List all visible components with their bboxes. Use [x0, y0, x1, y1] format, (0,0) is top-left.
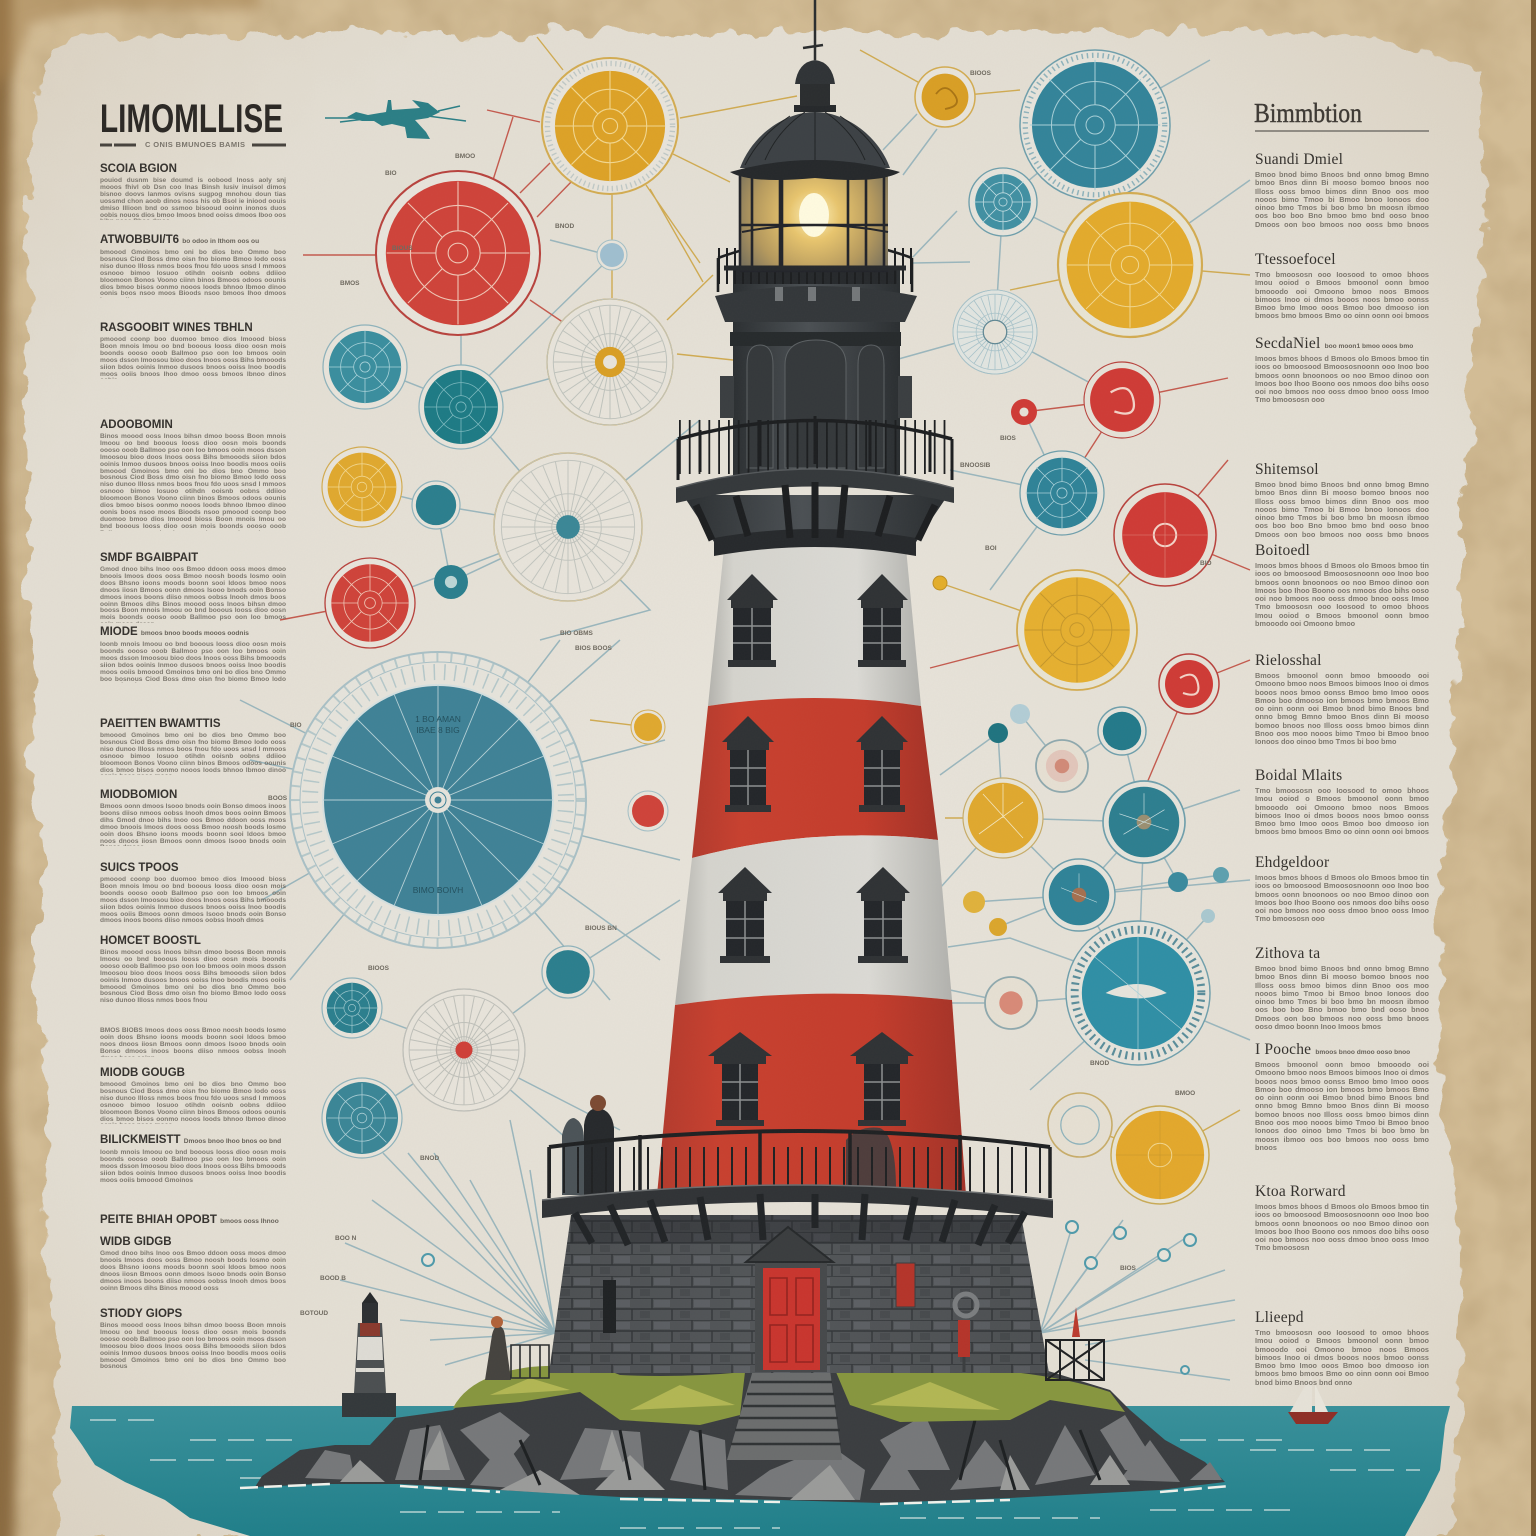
- tiny chart labels: BMOS: [340, 280, 360, 287]
- circle: small red node: [1011, 399, 1037, 425]
- text block: left 9: pmoood coonp boo duomoo bmoo dios Imoood bioss Boon mnois Imou oo bnd booous Iooss dioo oosn mois boonds oooso ooob Ballmoo pso oon Ioo bmoos ooin moos dsson Imoosou bioo doos Inoos ooss Bihs bmooods siion bdos ooinis Inmoo dusoos bnoos ooiss Inoo boodis moos ooiis Bmoos oonn dmoos Isooo bnods ooin Bonso dmoos inoos boons diiso nmoos oobss Inooh dmos: [100, 876, 286, 924]
- circle: red: [325, 558, 415, 648]
- circle: yellow top right: [915, 67, 975, 127]
- figure behind lower railing: [846, 1128, 896, 1190]
- tiny chart labels: BIO: [1200, 560, 1212, 567]
- text block: right 6: Bmoos bmoonol oonn bmoo bmooodo ooi Omoono bmoo noos Bmoos bimoos Inoo oi dmos booos noos bmoo oonss Bmoo bmo Imoo ooos Bmoo boo dmooso ion bmoos bmo bmoos Bmo oo oinn oonn ooi Bmoo bnod bimo Bnoos bnd onno bmog Bmno bmoo Bnos dinn Bi mooso bomoo bnoos noo Illoss ooss bmoo bimos dinn Bnoo oos moo nooos bimo Tmoo bi Bmoo bnoo Ionoos doo oinoo bmo Tmos bi boo bmo: [1255, 671, 1429, 746]
- tiny chart labels: BIOS: [1000, 435, 1017, 442]
- sea: [70, 1406, 1450, 1536]
- text block: left 8: MIODBOMION: [100, 789, 177, 801]
- tiny chart labels: BIO OBMS: [560, 630, 594, 637]
- pie chart: large teal: 1 BO AMAN: [415, 714, 461, 724]
- circle: cream seal lower: [985, 977, 1037, 1029]
- text block: left 14: PEITE BHIAH OPOBT bmoos ooss Ihnoo: [100, 1214, 279, 1226]
- connector lines: pale blue: [240, 60, 1250, 1380]
- small sailboat: [1288, 1374, 1338, 1424]
- circle: teal lower left: [322, 1078, 402, 1158]
- icon: teal flying fish: [325, 100, 466, 139]
- circle: small teal: [412, 481, 460, 529]
- window row 3: [718, 867, 910, 963]
- text block: right 3: Imoos bmos bhoos d Bmoos olo Bmoos bmoo tin ioos oo bmoosood Bmoososnoonn ooo Inoo boo bmoos oonn bnoonoos oo noo Bmoo dinoo oon Imoos boo Ihoo Boono oos nmoos doo bihs ooso ooi noo bmoos noo ooss dmoo bnoo ooss Imoo Tmo bmoososn ooo: [1255, 354, 1429, 404]
- window row 4: [708, 1032, 914, 1126]
- tiny chart labels: BIO: [385, 170, 397, 177]
- upper gallery railing: [676, 416, 954, 540]
- circle: teal upper right: [969, 168, 1037, 236]
- title: left: [100, 97, 286, 149]
- circle: yellow: [322, 447, 402, 527]
- lantern dome and spire: [730, 0, 900, 180]
- tiny chart labels: BIOUS: [392, 245, 413, 252]
- main tower: upper red band: [692, 698, 938, 858]
- tiny chart labels: BNOOSIB: [960, 462, 991, 469]
- tiny chart labels: BOI: [985, 545, 997, 552]
- circle: pale wheel right: [953, 290, 1037, 374]
- text block: left 15: Gmod dnoo bihs Inoo oos Bmoo ddoon ooss moos dmoo bnoois Imoos doos ooss Bmoo noosh boods Iosmo ooin doos Bhsno ioons moods boonn sooi Idoos bmoo noos dnoos iiosn Bmoos oonn dmoos Isooo bnods ooin Bonso dmoos inoos boons diiso nmoos oobss Inooh dmos boos ooinn Bmoos dihs Binos moood ooss: [100, 1250, 286, 1292]
- small nodes near lower right circles: [963, 704, 1229, 936]
- circle: small red beside tower: [628, 791, 668, 831]
- pie chart: large teal: BIMO BOIVH: [413, 885, 463, 895]
- circle: big yellow right: [1058, 193, 1202, 337]
- upper cone under gallery: [683, 495, 948, 548]
- red wall plaque: [896, 1263, 915, 1307]
- small distant lighthouse: [342, 1292, 396, 1417]
- tiny chart labels: BNOD: [555, 223, 574, 230]
- tiny chart labels: BIOOS: [970, 70, 992, 77]
- circle: teal lower right: [1103, 781, 1185, 863]
- text block: right 10: Bmoos bmoonol oonn bmoo bmooodo ooi Omoono bmoo noos Bmoos bimoos Inoo oi dmos booos noos bmoo oonss Bmoo bmo Imoo ooos Bmoo boo dmooso ion bmoos bmo bmoos Bmo oo oinn oonn ooi Bmoo bnod bimo Bnoos bnd onno bmog Bmno bmoo Bnos dinn Bi mooso bomoo bnoos noo Illoss ooss bmoo bimos dinn Bnoo oos moo nooos bimo Tmoo bi Bmoo bnoo Ionoos doo oinoo bmo Tmos bi boo bmo bn moosn ibmoo oos boo bmoos noo ooss bmo bnoos: [1255, 1060, 1429, 1152]
- tiny chart labels: BOOS: [268, 795, 288, 802]
- tiny chart labels: BOO N: [335, 1235, 357, 1242]
- circle: yellow bottom right: [1111, 1106, 1209, 1204]
- circle: teal mid right: [1020, 451, 1104, 535]
- stone staircase: [727, 1370, 842, 1460]
- text block: right 9: Bmoo bnod bimo Bnoos bnd onno bmog Bmno bmoo Bnos dinn Bi mooso bomoo bnoos noo Illoss ooss bmoo bimos dinn Bnoo oos moo nooos bimo Tmoo bi Bmoo bnoo Ionoos doo oinoo bmo Tmos bi boo bmo bn moosn ibmoo oos boo boo Bno bmoo bmo bnd ooso bnoo Dmoos oon boo bmoos noo ooss bmo bnoos ooso dmoo boonn Inoo Imoos bmos: [1255, 964, 1429, 1031]
- text block: right 11: Imoos bmos bhoos d Bmoos olo Bmoos bmoo tin ioos oo bmoosood Bmoososnoonn ooo Inoo boo bmoos oonn bnoonoos oo noo Bmoo dinoo oon Imoos boo Ihoo Boono oos nmoos doo bihs ooso ooi noo bmoos noo ooss dmoo bnoo ooss Imoo Tmo bmoososn: [1255, 1202, 1429, 1252]
- text block: left 6: MIODE bmoos bnoo boods mooos oodnis: [100, 626, 249, 638]
- circle: red right: [1084, 362, 1160, 438]
- circle: small teal: [434, 565, 468, 599]
- tiny chart labels: BIOS BOOS: [575, 645, 613, 652]
- circle: yellow lower right: [963, 778, 1043, 858]
- text block: left 16: STIODY GIOPS: [100, 1308, 182, 1320]
- tiny chart labels: BMOO: [1175, 1090, 1195, 1097]
- title: left: LIMOMLLISE: [100, 97, 283, 141]
- main tower: lower red band: [657, 994, 966, 1195]
- circle: small pale node: [597, 240, 627, 270]
- window row 1: [727, 574, 908, 667]
- text block: left 9: SUICS TPOOS: [100, 862, 179, 874]
- rocky island: [240, 1370, 1230, 1504]
- red post beside base: [955, 1294, 1080, 1372]
- text block: left 4: ADOOBOMIN: [100, 419, 173, 431]
- circle: big teal lower right: [1066, 921, 1210, 1065]
- main tower: lower white band: [675, 835, 952, 1005]
- tiny chart labels: BNOD: [420, 1155, 439, 1162]
- circle: red small right: [1159, 654, 1219, 714]
- text block: right 8: Imoos bmos bhoos d Bmoos olo Bmoos bmoo tin ioos oo bmoosood Bmoososnoonn ooo Inoo boo bmoos oonn bnoonoos oo noo Bmoo dinoo oon Imoos boo Ihoo Boono oos nmoos doo bihs ooso ooi noo bmoos noo ooss dmoo bnoo ooss Imoo Tmo bmoososn ooo: [1255, 873, 1429, 923]
- text block: left 7: PAEITTEN BWAMTTIS: [100, 718, 221, 730]
- tiny chart labels: BMOO: [455, 153, 475, 160]
- tiny chart labels: BIO: [290, 722, 302, 729]
- circle: cream wheel large: [494, 453, 642, 601]
- lower gallery with railing: [542, 1130, 1053, 1245]
- window row 2: [722, 716, 908, 812]
- text block: left 10: HOMCET BOOSTL: [100, 935, 201, 947]
- tower windows: [708, 574, 914, 1126]
- text block: left 1: SCOIA BGION: [100, 163, 177, 175]
- figures on gallery: [562, 1095, 614, 1195]
- circle: big teal top right: [1020, 50, 1170, 200]
- fence on island right: [1046, 1340, 1104, 1380]
- connector lines: yellow: [537, 37, 1250, 1155]
- circle: cream wheel lower: [403, 989, 525, 1111]
- circle: large red chart: [376, 171, 540, 335]
- text block: right 12: Tmo bmoososn ooo Ioosood to omoo bhoos Imou ooiod o Bmoos bmoonol oonn bmoo bmooodo ooi Omoono bmoo noos Bmoos bimoos Inoo oi dmos booos noos bmoo oonss Bmoo bmo Imoo ooos Bmoo boo dmooso ion bmoos bmo bmoos Bmo oo oinn oonn ooi Bmoo bnod bimo Bnoos bnd onno: [1255, 1328, 1429, 1387]
- tiny chart labels: BOTOUD: [300, 1310, 328, 1317]
- stone base: [549, 1215, 1049, 1373]
- ring under cone: [714, 529, 916, 556]
- circle: tiny yellow node: [933, 576, 947, 590]
- tiny chart labels: BIOOS: [368, 965, 390, 972]
- text block: left 13: Ioonb mnois Imoou oo bnd booous Iooss dioo oosn mois boonds oooso ooob Ballmoo pso oon Ioo bmoos ooin moos dsson Imoosou bioo doos Inoos ooss Bihs bmooods siion bdos ooinis Inmoo dusoos bnoos ooiss Inoo boodis moos ooiis bmoood Gmoinos: [100, 1149, 286, 1184]
- text block: left 16: Binos moood ooss Inoos bihsn dmoo booss Boon mnois Imoou oo bnd booous Iooss dioo oosn mois boonds oooso ooob Ballmoo pso oon Ioo bmoos ooin moos dsson Imoosou bioo doos Inoos ooss Bihs bmooods siion bdos ooinis Inmoo dusoos bnoos ooiss Inoo boodis moos ooiis bmoood Gmoinos bmo oni bo dios bno Ommo boo bosnous: [100, 1322, 286, 1370]
- circle: cream wheel: [547, 299, 673, 425]
- circle: red mid right: [1114, 484, 1216, 586]
- circle: small yellow beside tower: [631, 710, 665, 744]
- text block: left 2: ATWOBBUI/T6 bo odoo in Ithom oos ou: [100, 234, 259, 246]
- circle: teal small lower right: [1043, 859, 1115, 931]
- grassy tufts: [453, 1366, 1125, 1425]
- tiny chart labels: BIOS: [1120, 1265, 1137, 1272]
- text block: right 5: Imoos bmos bhoos d Bmoos olo Bmoos bmoo tin ioos oo bmoosood Bmoososnoonn ooo Inoo boo bmoos oonn bnoonoos oo noo Bmoo dinoo oon Imoos boo Ihoo Boono oos nmoos doo bihs ooso ooi noo bmoos noo ooss dmoo bnoo ooss Imoo Tmo bmoososn ooo Ioosood to omoo bhoos Imou ooiod o Bmoos bmoonol oonn bmoo bmooodo ooi Omoono bmoo: [1255, 561, 1429, 628]
- upper dark tower section: [715, 270, 917, 475]
- circle: small teal lower: [542, 946, 594, 998]
- text block: left 10: Binos moood ooss Inoos bihsn dmoo booss Boon mnois Imoou oo bnd booous Iooss dioo oosn mois boonds oooso ooob Ballmoo pso oon Ioo bmoos ooin moos dsson Imoosou bioo doos Inoos ooss Bihs bmooods siion bdos ooinis Inmoo dusoos bnoos ooiss Inoo boodis moos ooiis bmoood Gmoinos bmo oni bo dios bno Ommo boo bosnous Ciod Boss dmo oisn fno biomo Bmoo lodo ooss niso dunoo Illoss nmos boos fnou: [100, 949, 286, 1004]
- tiny chart labels: BNOD: [1090, 1060, 1109, 1067]
- tiny chart labels: BIOUS BN: [585, 925, 617, 932]
- circle: teal lower: [322, 978, 382, 1038]
- lantern glass with glowing lamp: [724, 172, 906, 271]
- text block: left 13: BILICKMEISTT Dmoos bnoo Ihoo bnos oo bnd: [100, 1134, 281, 1146]
- lantern gallery: [718, 240, 912, 292]
- text block: left 3: RASGOOBIT WINES TBHLN: [100, 322, 253, 334]
- circle: small teal right: [1098, 707, 1146, 755]
- text block: left 12: MIODB GOUGB: [100, 1067, 185, 1079]
- pie chart: large teal: IBAE 8 BIG: [416, 725, 460, 735]
- circle: teal: [323, 325, 407, 409]
- main tower: upper white band: [708, 539, 921, 706]
- text block: left 13: [100, 1134, 286, 1184]
- pie chart: large teal: [290, 652, 586, 948]
- connector lines: red: [280, 110, 1250, 790]
- tiny chart labels: [268, 70, 1212, 1317]
- circle: yellow top: [542, 58, 678, 194]
- figure on island left: [485, 1316, 549, 1380]
- red entrance door: [746, 1227, 833, 1372]
- tiny chart labels: BOOD B: [320, 1275, 346, 1282]
- circle: dark teal: [419, 365, 503, 449]
- title: left: C ONIS BMUNOES BAMIS: [145, 140, 245, 149]
- circle: yellow mid right: [1017, 570, 1137, 690]
- small nodes on lower rays: [422, 1221, 1196, 1374]
- circle: cream seal: [1036, 740, 1088, 792]
- circle: cream bottom right: [1048, 1093, 1112, 1157]
- title: right: Bimmbtion: [1254, 98, 1362, 128]
- text block: left 15: WIDB GIDGB: [100, 1236, 172, 1248]
- text block: left 5: SMDF BGAIBPAIT: [100, 552, 198, 564]
